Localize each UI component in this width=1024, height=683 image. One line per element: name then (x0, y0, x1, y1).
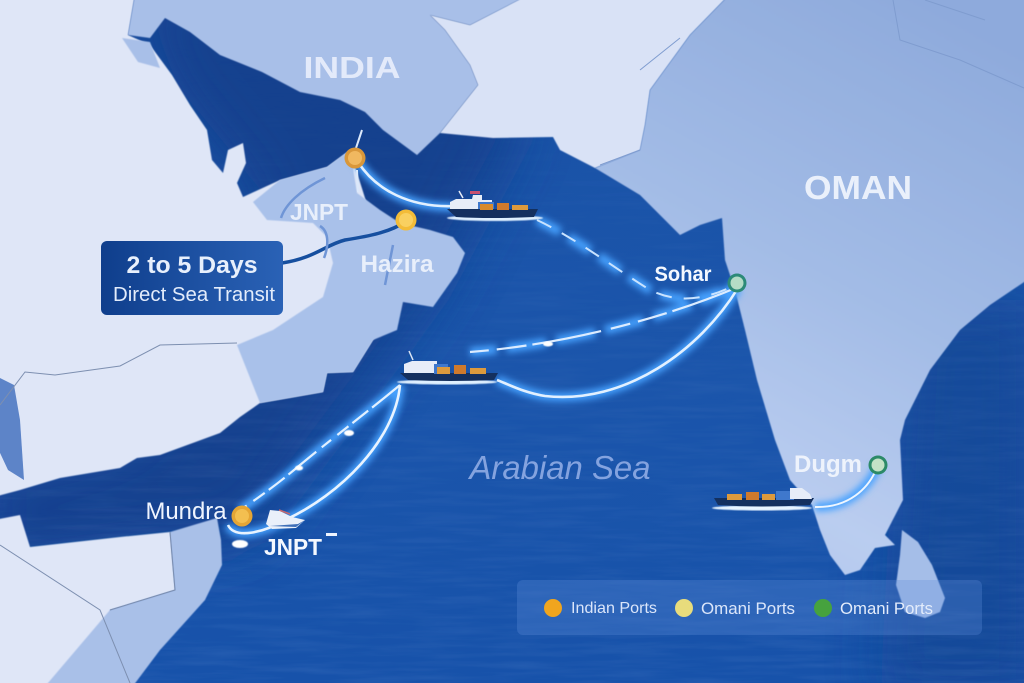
land: India (595, 0, 1024, 575)
ship: small ship near JNPT (266, 510, 305, 529)
route: central ship to Mundra, dashed (240, 385, 400, 510)
port marker: Dugm (green) (868, 456, 888, 474)
land: Somalia (42, 518, 222, 683)
label: JNPT on land: JNPT (290, 199, 348, 225)
land: central light region (430, 0, 730, 168)
legend item: Omani Ports green: Omani Ports (840, 600, 933, 618)
ship: northern container ship (447, 191, 543, 221)
label: INDIA: INDIA (304, 50, 400, 85)
label: Hazira: Hazira (360, 251, 434, 278)
strait highlight (356, 130, 362, 192)
callout headline: 2 to 5 Days (126, 252, 258, 279)
ship: central container ship (397, 351, 498, 384)
label: Mundra: Mundra (146, 498, 227, 525)
land: small island near gulf head (122, 38, 160, 68)
label: JNPT at sea: JNPT (264, 534, 322, 560)
port marker: Hazira (yellow) (396, 210, 416, 230)
sea water texture (114, 440, 1004, 683)
port marker: JNPT north (orange) (344, 148, 366, 168)
callout connector line (282, 222, 405, 263)
route sparkles (232, 342, 553, 548)
land: Horn of Africa (0, 515, 175, 683)
land: Iran, top (128, 0, 720, 155)
route: central ship to JNPT, curved (228, 385, 400, 533)
land: Arabia (0, 0, 400, 497)
route: Sohar to central ship, dashed (470, 287, 738, 352)
label: Dugm: Dugm (794, 451, 862, 478)
land: Oman peninsula (237, 150, 465, 403)
route: Sohar to central ship, curved (497, 288, 738, 397)
callout: transit time (101, 241, 283, 315)
ship: southern container ship (712, 488, 814, 510)
faint river traces (281, 178, 393, 285)
border lines (600, 0, 1024, 165)
label: OMAN: OMAN (804, 169, 912, 206)
land: Sri Lanka (896, 530, 945, 618)
border lines (0, 532, 175, 683)
label: Sohar: Sohar (654, 263, 712, 286)
legend item: Indian Ports: Indian Ports (571, 600, 657, 617)
legend item: Omani Ports yellow: Omani Ports (701, 600, 795, 618)
border lines (0, 343, 237, 405)
legend (517, 580, 982, 635)
label: Arabian Sea: Arabian Sea (468, 449, 650, 486)
route: JNPT to ship (358, 162, 455, 206)
callout subtext: Direct Sea Transit (113, 284, 275, 306)
port marker: Sohar (green) (728, 274, 746, 292)
route glow (228, 158, 878, 533)
route: south ship to Dugm (815, 472, 875, 507)
route: ship to Sohar (537, 220, 735, 298)
land: Red Sea inlet (0, 375, 24, 480)
port marker: Mundra (orange) (232, 506, 252, 526)
